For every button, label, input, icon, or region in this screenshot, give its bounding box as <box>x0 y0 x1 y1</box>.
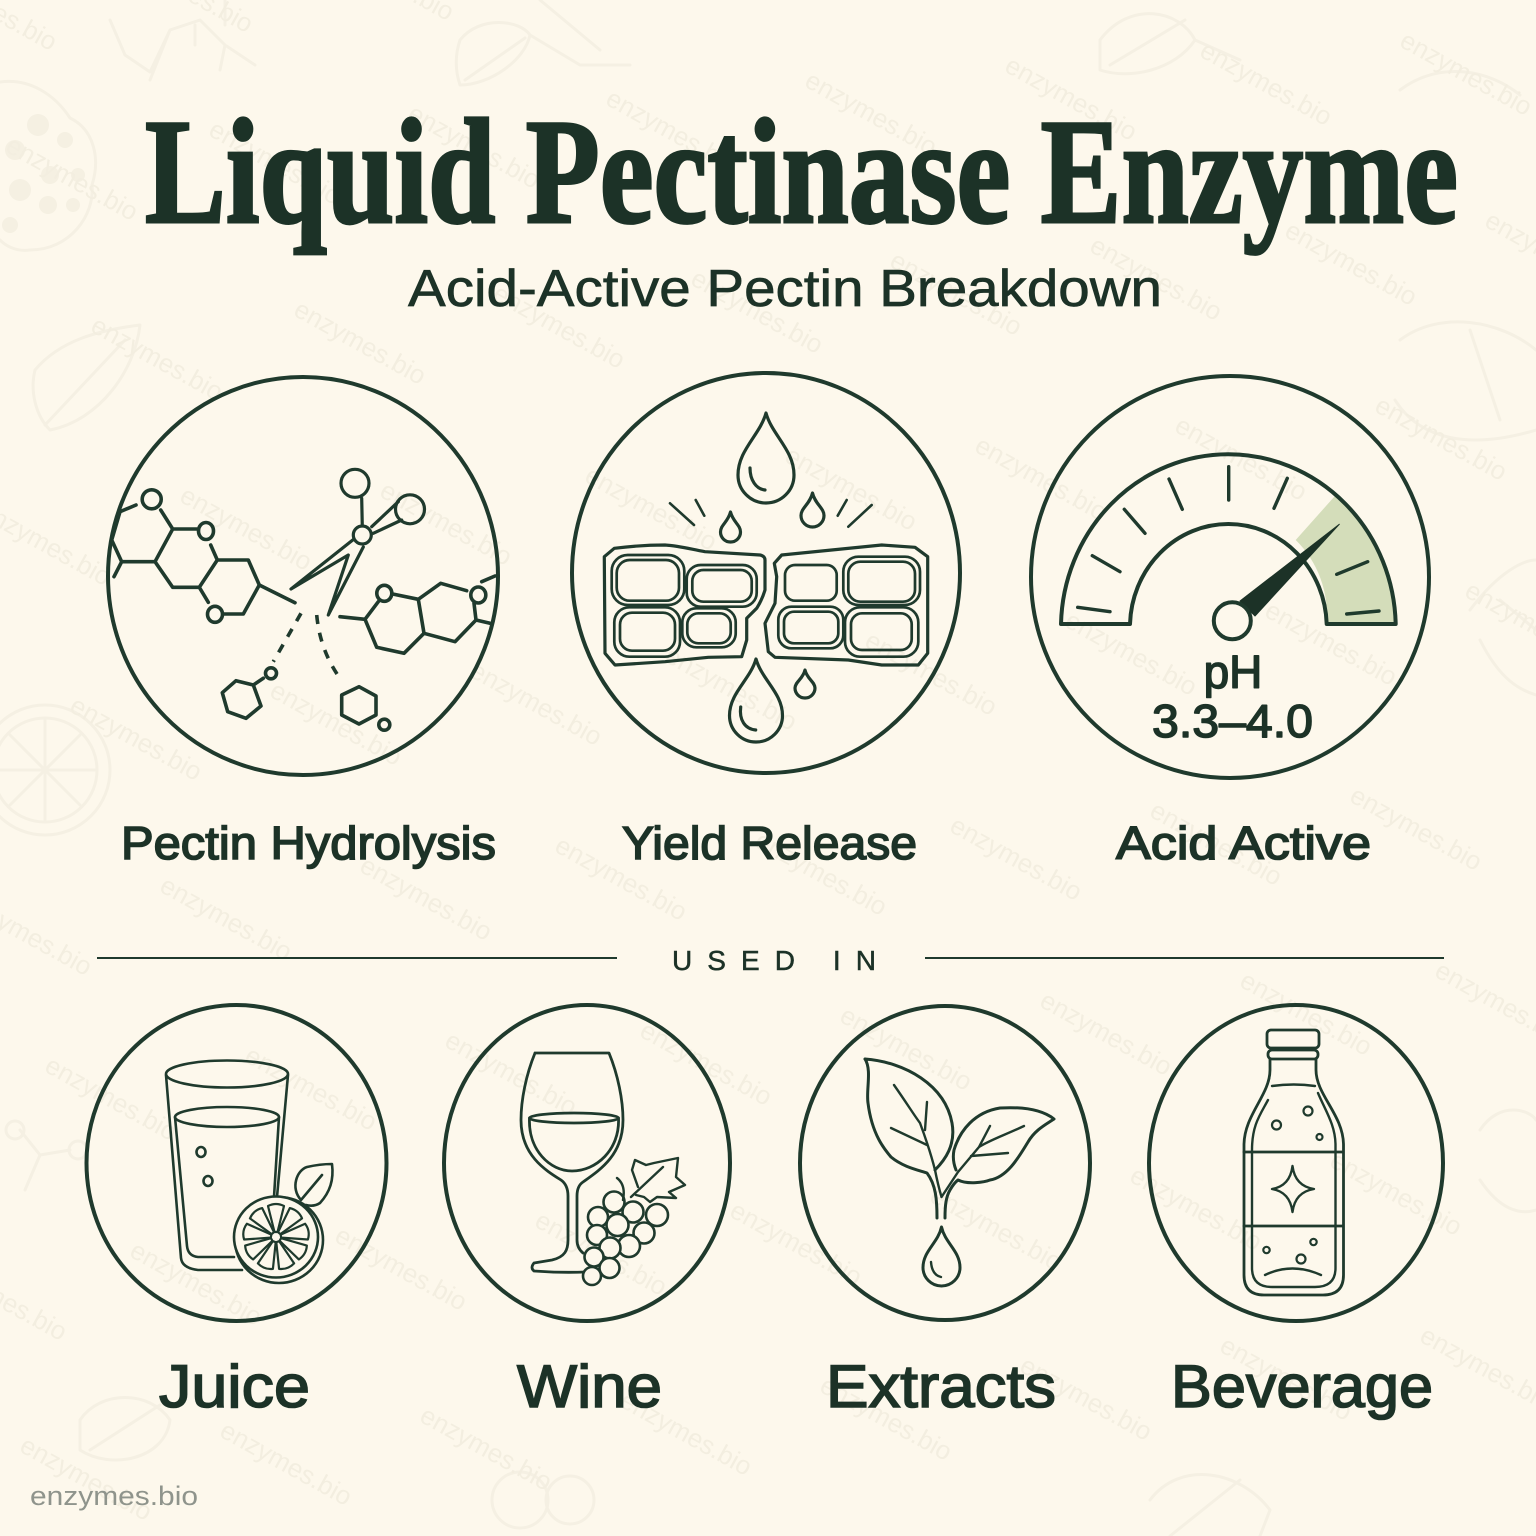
watermark pattern: enzymes.bio <box>330 1220 472 1317</box>
watermark pattern: enzymes.bio <box>580 460 722 557</box>
watermark pattern: enzymes.bio <box>1325 1145 1467 1242</box>
watermark pattern: enzymes.bio <box>780 440 922 537</box>
vine leaf <box>617 1158 685 1202</box>
juice drops <box>720 413 824 742</box>
watermark pattern: enzymes.bio <box>15 1430 157 1527</box>
gauge dial <box>1061 454 1396 624</box>
watermark pattern: enzymes.bio <box>550 830 692 927</box>
watermark pattern: enzymes.bio <box>1000 50 1142 147</box>
panel: beverage icon <box>1149 1005 1443 1321</box>
watermark pattern: enzymes.bio <box>835 1000 977 1097</box>
watermark pattern: enzymes.bio <box>1280 215 1422 312</box>
gauge ticks <box>1078 467 1379 614</box>
watermark pattern: enzymes.bio <box>1370 390 1512 487</box>
grape cluster <box>583 1192 668 1285</box>
panel: juice icon <box>86 1005 386 1321</box>
label: juice: Juice <box>159 1353 310 1420</box>
label: yield release: Yield Release <box>622 817 917 869</box>
gauge needle <box>1240 524 1339 616</box>
scissors <box>291 469 424 615</box>
pH label: pH <box>1204 646 1262 698</box>
highlighted acid zone <box>1296 494 1396 624</box>
watermark pattern: enzymes.bio <box>1195 35 1337 132</box>
watermark pattern: enzymes.bio <box>1060 605 1202 702</box>
watermark pattern: enzymes.bio <box>355 850 497 947</box>
left cell wall fragment <box>604 545 765 665</box>
watermark pattern: enzymes.bio <box>660 640 802 737</box>
watermark pattern: enzymes.bio <box>403 98 545 195</box>
icon ring <box>572 373 960 773</box>
watermark pattern: enzymes.bio <box>125 1235 267 1332</box>
subtitle: Acid-Active Pectin Breakdown <box>408 260 1162 318</box>
panel: pectin hydrolysis icon <box>108 377 498 775</box>
label: extracts: Extracts <box>826 1353 1056 1420</box>
watermark pattern: enzymes.bio <box>1035 985 1177 1082</box>
watermark pattern: enzymes.bio <box>1015 1350 1157 1447</box>
watermark pattern: enzymes.bio <box>1235 965 1377 1062</box>
watermark pattern: enzymes.bio <box>885 245 1027 342</box>
panel: yield release icon <box>572 373 960 773</box>
left pectin molecule <box>112 490 295 622</box>
watermark pattern: enzymes.bio <box>1125 1160 1267 1257</box>
watermark pattern: enzymes.bio <box>86 310 228 407</box>
juice glass <box>166 1060 288 1270</box>
watermark pattern: enzymes.bio <box>1215 1330 1357 1427</box>
right cell wall fragment <box>765 545 928 665</box>
watermark pattern: enzymes.bio <box>945 810 1087 907</box>
burst rays <box>670 500 872 527</box>
drop highlight <box>931 1262 941 1277</box>
watermark pattern: enzymes.bio <box>1345 780 1487 877</box>
watermark pattern: enzymes.bio <box>215 1415 357 1512</box>
watermark pattern: enzymes.bio <box>155 870 297 967</box>
icon ring <box>1031 376 1429 778</box>
panel: wine icon <box>444 1005 730 1321</box>
watermark pattern: enzymes.bio <box>1170 410 1312 507</box>
panel: acid active gauge icon <box>1031 376 1429 778</box>
icon ring <box>800 1006 1090 1320</box>
watermark pattern: enzymes.bio <box>265 675 407 772</box>
label: wine: Wine <box>517 1353 662 1420</box>
citrus slice <box>234 1164 332 1283</box>
icon ring <box>86 1005 386 1321</box>
bubbles <box>1263 1106 1322 1264</box>
plant sprig <box>865 1059 1054 1218</box>
watermark pattern: enzymes.bio <box>1085 230 1227 327</box>
watermark pattern: enzymes.bio <box>601 83 743 180</box>
extract drop <box>923 1227 960 1286</box>
pH range value: 3.3–4.0 <box>1152 695 1313 747</box>
watermark pattern: enzymes.bio <box>40 1050 182 1147</box>
label: acid active: Acid Active <box>1116 817 1371 869</box>
watermark pattern: enzymes.bio <box>686 263 828 360</box>
watermark pattern: enzymes.bio <box>415 1400 557 1497</box>
watermark pattern: enzymes.bio <box>615 1385 757 1482</box>
watermark pattern: enzymes.bio <box>815 1370 957 1467</box>
watermark pattern: enzymes.bio <box>1260 595 1402 692</box>
gauge hub <box>1214 602 1251 639</box>
watermark pattern: enzymes.bio <box>970 430 1112 527</box>
watermark pattern: enzymes.bio <box>204 114 346 211</box>
watermark pattern: enzymes.bio <box>289 294 431 391</box>
icon ring <box>108 377 498 775</box>
watermark pattern: enzymes.bio <box>635 1015 777 1112</box>
footer brand: enzymes.bio <box>30 1481 198 1511</box>
watermark pattern: enzymes.bio <box>65 690 207 787</box>
cleaved fragments <box>222 613 390 730</box>
watermark pattern: enzymes.bio <box>1395 25 1536 122</box>
watermark pattern: enzymes.bio <box>465 655 607 752</box>
section heading: USED IN <box>672 945 876 976</box>
watermark pattern: enzymes.bio <box>440 1025 582 1122</box>
panel: extracts icon <box>800 1006 1090 1320</box>
watermark pattern: enzymes.bio <box>240 1040 382 1137</box>
bottle <box>1244 1030 1344 1295</box>
watermark pattern: enzymes.bio <box>750 825 892 922</box>
right pectin molecule <box>340 576 495 653</box>
icon ring <box>444 1005 730 1321</box>
icon ring <box>1149 1005 1443 1321</box>
watermark pattern: enzymes.bio <box>375 475 517 572</box>
watermark pattern: enzymes.bio <box>175 480 317 577</box>
label: beverage: Beverage <box>1171 1353 1433 1420</box>
watermark pattern: enzymes.bio <box>1 130 143 227</box>
watermark pattern: enzymes.bio <box>860 625 1002 722</box>
watermark pattern: enzymes.bio <box>1145 795 1287 892</box>
watermark pattern: enzymes.bio <box>725 1195 867 1292</box>
watermark pattern: enzymes.bio <box>800 65 942 162</box>
wine glass <box>521 1053 623 1272</box>
label: pectin hydrolysis: Pectin Hydrolysis <box>121 817 496 869</box>
watermark pattern: enzymes.bio <box>488 278 630 375</box>
watermark pattern: enzymes.bio <box>925 1180 1067 1277</box>
watermark pattern: enzymes.bio <box>530 1205 672 1302</box>
